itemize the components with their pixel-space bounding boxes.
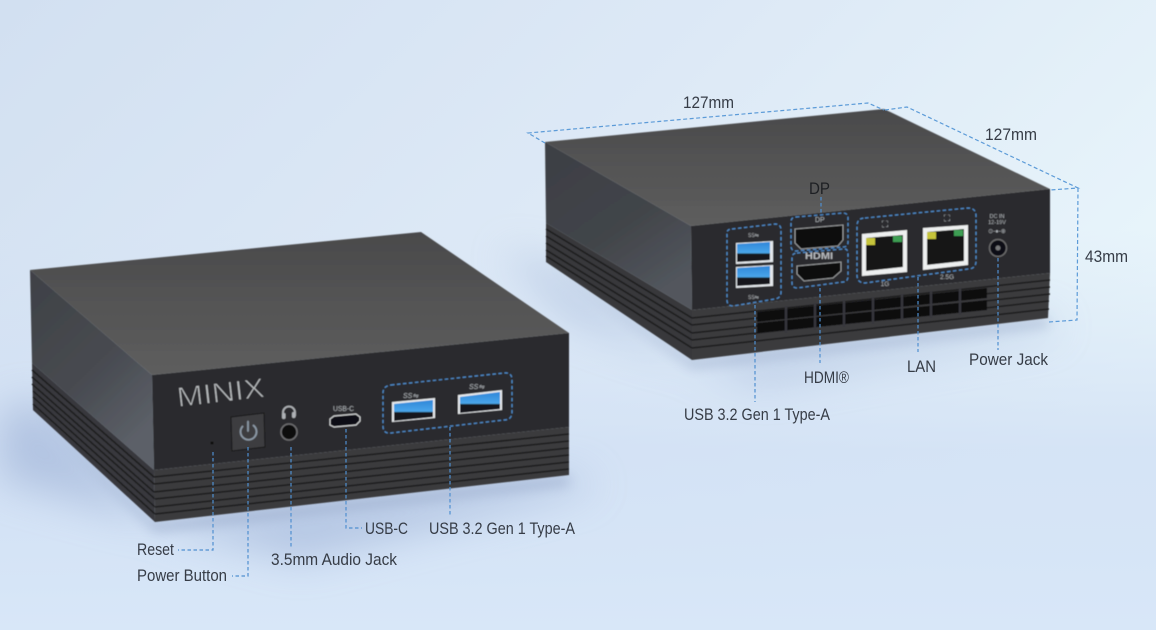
front device left side — [30, 270, 154, 470]
audio jack — [281, 406, 297, 440]
label: rear USB: USB 3.2 Gen 1 Type-A — [684, 406, 830, 424]
front device top — [30, 232, 569, 375]
rear device front fins — [692, 273, 1050, 360]
MINIX logo: MINIX — [175, 372, 266, 413]
LAN port 1G: ⛶ — [881, 219, 889, 229]
label: USB-C: USB-C — [365, 520, 408, 538]
LAN port 1G: 1G — [881, 281, 889, 288]
rear port highlight boxes — [727, 208, 976, 306]
front USB highlight box — [383, 373, 512, 433]
floor shadows — [0, 250, 1060, 560]
label: Power Button: Power Button — [137, 567, 227, 585]
dimension label: depth: 127mm — [985, 126, 1037, 144]
front panel — [152, 333, 569, 470]
power jack: ⊙-●-⊕ — [988, 229, 1006, 235]
HDMI port — [797, 251, 841, 281]
front device left fins — [32, 363, 155, 522]
USB-C port: USB-C — [333, 406, 354, 413]
LAN port 2.5G: ⛶ — [943, 213, 951, 223]
front USB port right — [458, 384, 502, 414]
label: HDMI: HDMI® — [804, 369, 849, 387]
label: Power Jack: Power Jack — [969, 351, 1049, 369]
dimension label: width: 127mm — [683, 94, 734, 112]
rear vents — [757, 288, 987, 333]
device: front view — [30, 232, 569, 522]
front USB port left — [392, 393, 435, 422]
dimension lines — [528, 103, 1078, 322]
rear device left side — [545, 142, 692, 310]
device: rear view — [545, 109, 1050, 360]
power button — [231, 413, 265, 451]
rear device left fins — [546, 223, 692, 360]
label: front USB: USB 3.2 Gen 1 Type-A — [429, 520, 575, 538]
label: Reset: Reset — [137, 541, 174, 559]
USB-C port — [330, 406, 360, 427]
label: DP: DP — [809, 180, 830, 198]
LAN port 1G — [862, 219, 907, 288]
rear USB ports: SS⇋ — [748, 295, 759, 301]
front fins — [154, 427, 569, 522]
HDMI port: HDMI — [805, 251, 833, 261]
LAN port 2.5G — [923, 213, 968, 281]
front USB port left: SS⇋ — [403, 393, 419, 400]
LAN port 2.5G: 2.5G — [940, 274, 954, 281]
front USB port right: SS⇋ — [469, 384, 485, 391]
rear USB ports: SS⇋ — [748, 233, 759, 239]
leader lines — [178, 197, 998, 576]
DP port — [795, 217, 843, 249]
rear device top — [545, 109, 1050, 226]
power jack — [988, 214, 1006, 256]
DP port: DP — [815, 217, 825, 224]
labels — [137, 94, 1128, 585]
power jack: DC IN — [990, 214, 1005, 220]
rear device front panel — [691, 189, 1050, 310]
dimension label: height: 43mm — [1085, 248, 1128, 266]
label: LAN: LAN — [907, 358, 936, 376]
rear USB ports — [736, 233, 773, 301]
reset pinhole — [210, 442, 214, 444]
label: Audio Jack: 3.5mm Audio Jack — [271, 551, 398, 569]
power jack: 12-19V — [988, 220, 1006, 226]
